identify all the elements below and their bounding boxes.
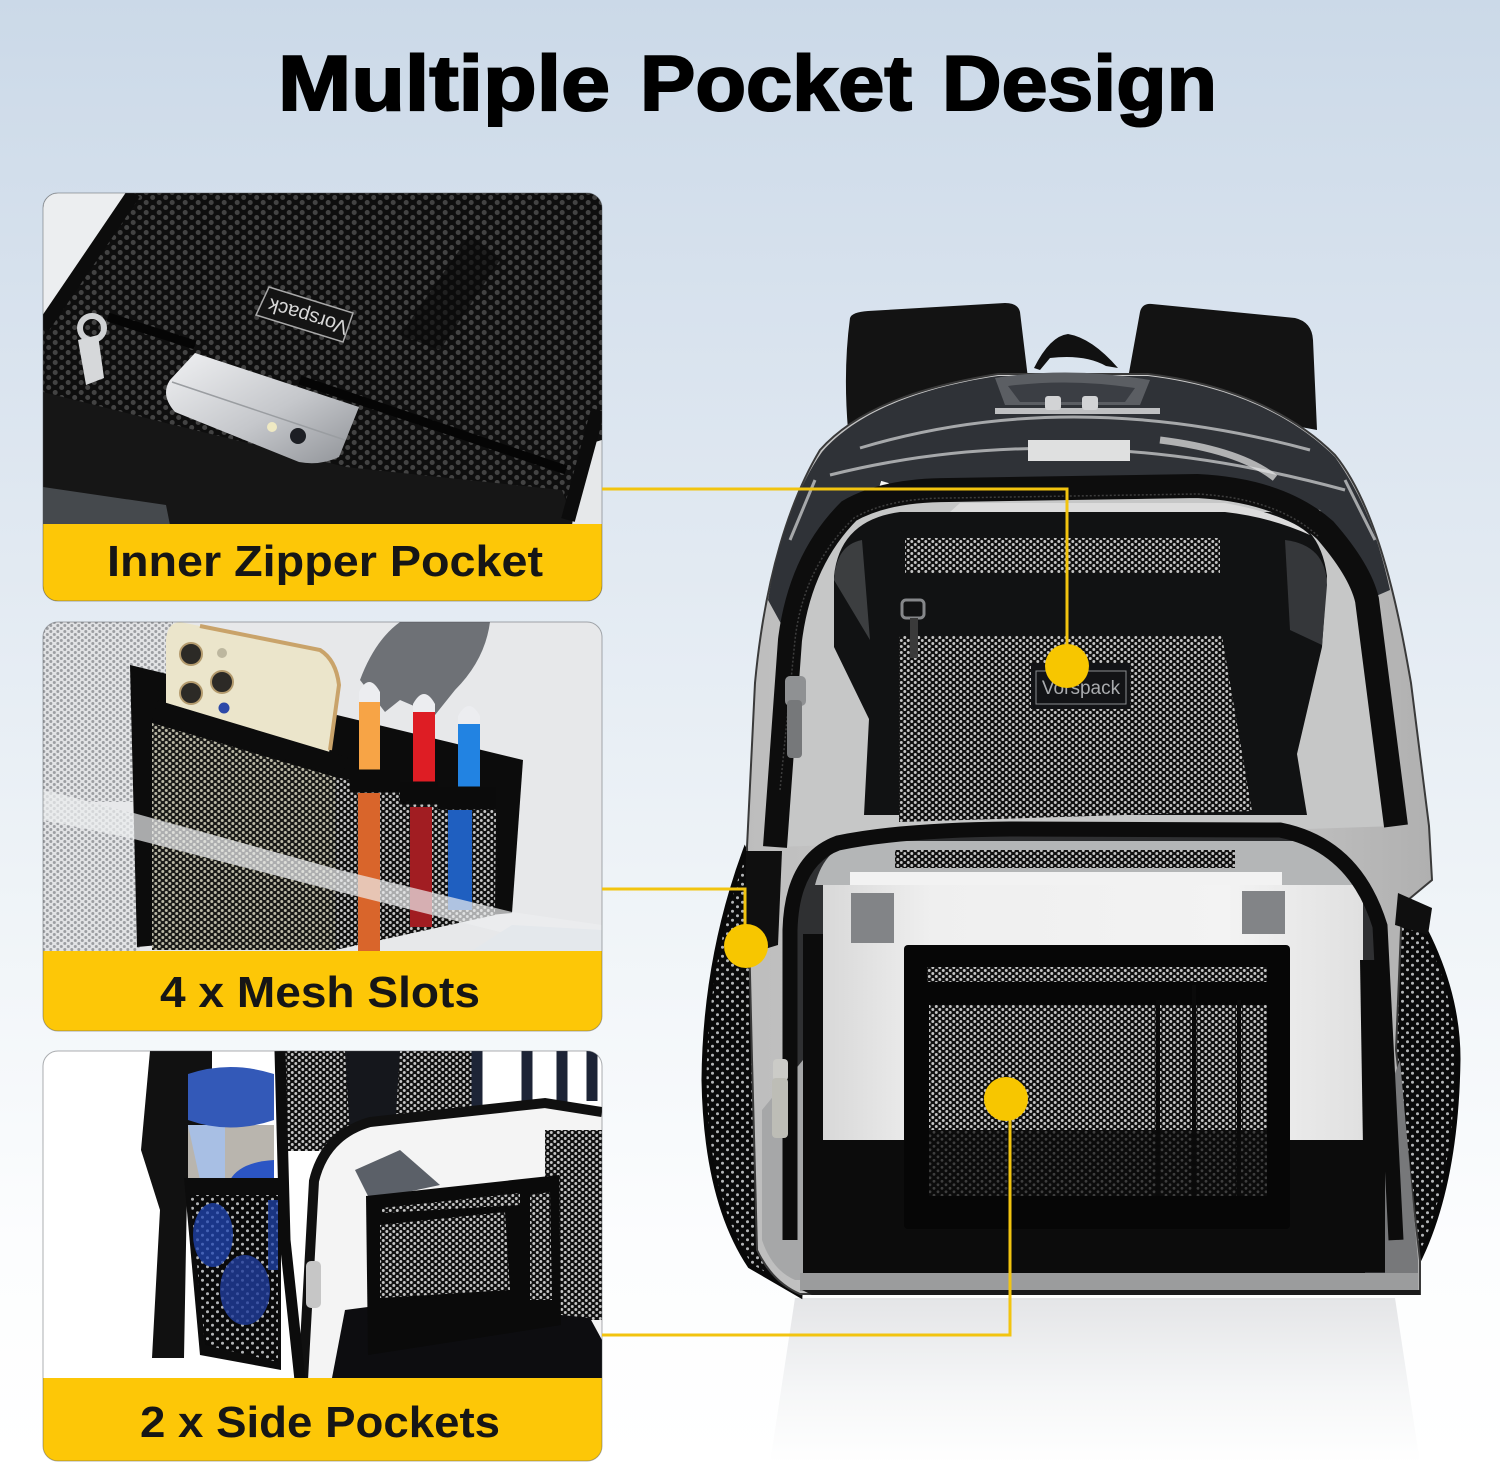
back straps	[141, 1051, 212, 1358]
clear top section	[815, 841, 1365, 885]
clear side strips	[1385, 1060, 1418, 1275]
inner fabric	[834, 512, 1327, 815]
label bar: 2 x Side Pockets	[140, 1398, 500, 1447]
photo: backpack side	[141, 1051, 602, 1380]
side straps	[745, 851, 1432, 955]
icon: water bottle	[188, 1067, 274, 1181]
clear bottom strip	[800, 1273, 1418, 1291]
handle	[1034, 334, 1118, 370]
upper front pocket	[775, 486, 1396, 847]
mesh pocket	[366, 1175, 561, 1315]
brand tag: Vorspack	[265, 293, 350, 338]
panel: mesh slots	[43, 622, 602, 1031]
black base	[823, 1140, 1365, 1273]
side mesh pocket	[184, 1178, 281, 1370]
hand	[360, 622, 490, 715]
icon: zipper pull	[306, 1261, 321, 1308]
pens	[350, 682, 496, 953]
icon: phone	[166, 353, 359, 463]
icon: zipper pull	[772, 1059, 788, 1138]
front clear pocket	[303, 1103, 602, 1380]
label bar	[43, 1378, 602, 1461]
photo: mesh pocket with phone	[43, 193, 602, 533]
pocket zipper	[775, 486, 1396, 847]
mesh pocket	[130, 665, 523, 950]
top zipper pulls	[995, 408, 1160, 414]
title: Pocket	[640, 39, 912, 127]
title: Design	[942, 39, 1217, 127]
white inner panel	[823, 885, 1363, 1141]
label bar: Inner Zipper Pocket	[107, 537, 543, 586]
icon: zipper pull	[785, 676, 806, 758]
callout dots	[724, 644, 1089, 1121]
label bar	[43, 524, 602, 601]
inner mesh panel	[899, 538, 1252, 822]
icon: phone	[166, 622, 339, 753]
label bar	[43, 951, 602, 1031]
pocket zipper	[790, 829, 1396, 1240]
photo: mesh organiser	[43, 622, 523, 951]
brand tag: Vorspack	[1042, 678, 1121, 699]
mesh card pocket	[904, 945, 1290, 1229]
back mesh and stripes	[285, 1051, 472, 1151]
panel: side pockets	[43, 1051, 602, 1461]
trim strips	[803, 934, 823, 1279]
lower front pocket	[762, 826, 1420, 1295]
clear top tabs	[851, 891, 1285, 943]
reflection	[770, 1298, 1420, 1463]
side seam	[280, 1051, 300, 1380]
top yoke	[768, 372, 1390, 640]
clear sheet	[43, 790, 512, 922]
side mesh pockets	[704, 851, 1458, 1295]
panel: inner zipper pocket	[43, 193, 602, 601]
transparent shell	[747, 374, 1432, 1294]
title: Multiple	[278, 39, 610, 127]
label bar: 4 x Mesh Slots	[160, 968, 480, 1017]
icon: zipper pull	[78, 316, 104, 385]
backpack	[704, 303, 1458, 1463]
icon: zipper pull	[902, 600, 924, 658]
shoulder straps	[846, 303, 1317, 430]
brand tag	[1031, 663, 1130, 709]
callout lines	[602, 489, 1067, 1335]
panel outlines	[43, 193, 602, 1461]
